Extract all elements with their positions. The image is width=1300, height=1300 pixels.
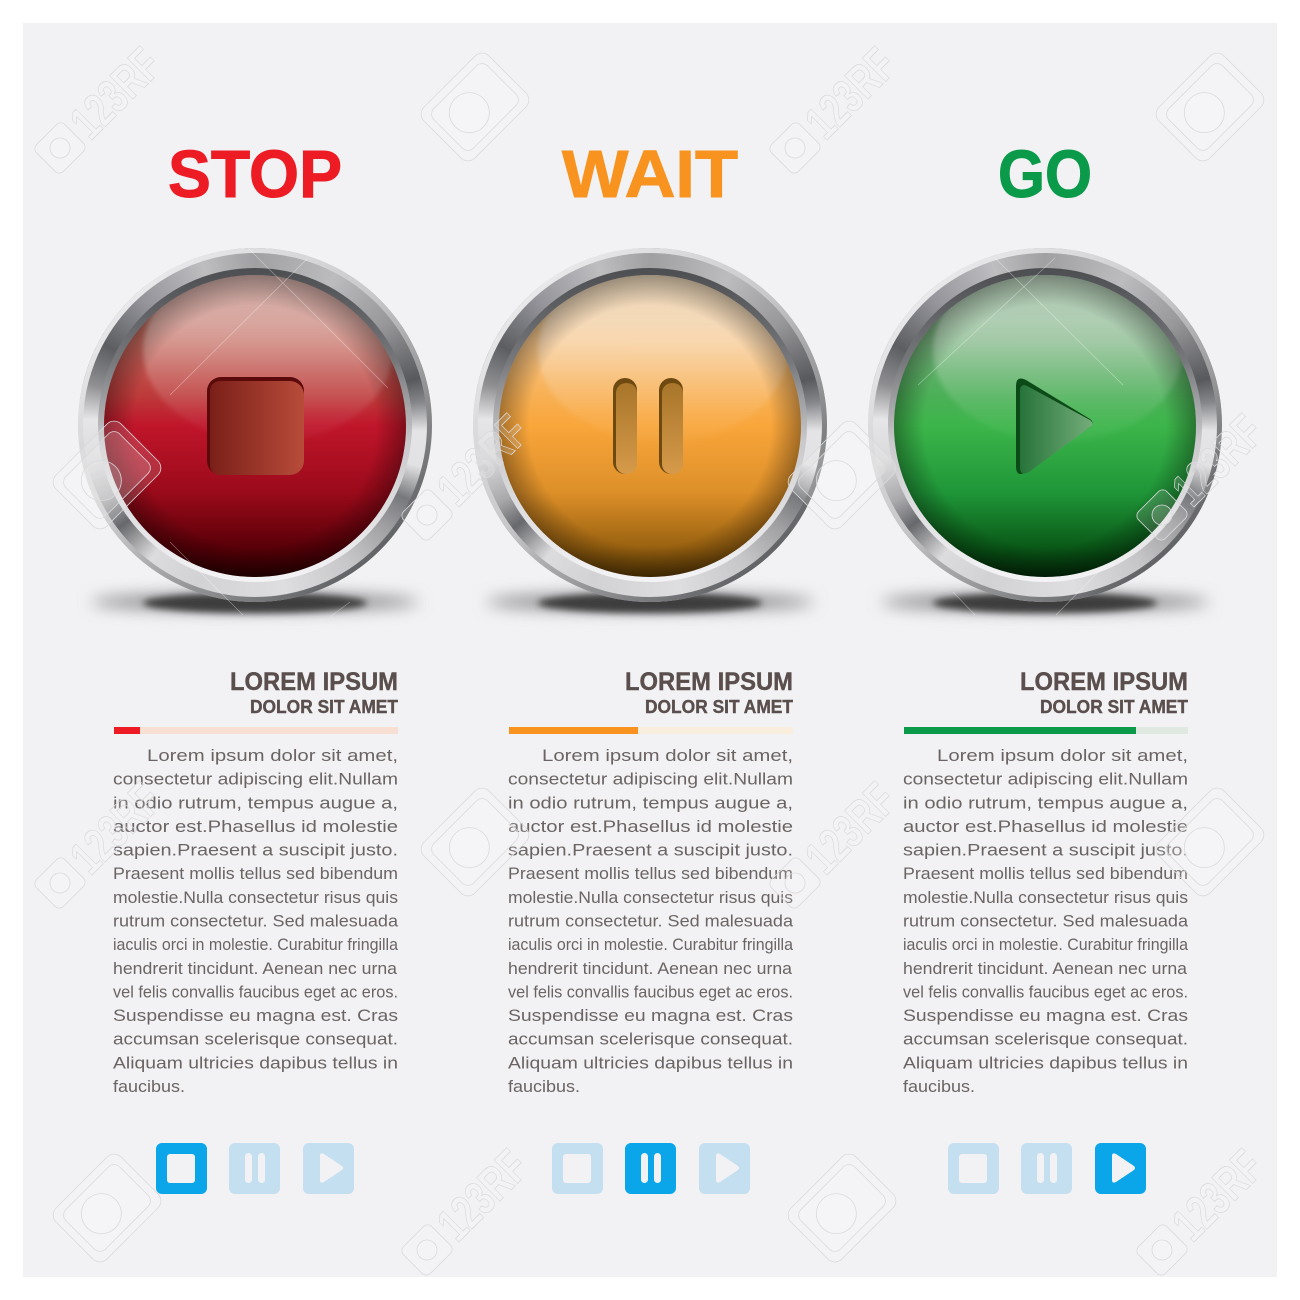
body text: Suspendisse eu magna est. Cras bbox=[508, 1006, 793, 1025]
column heading: LOREM IPSUM bbox=[230, 668, 398, 696]
body text: iaculis orci in molestie. Curabitur fringilla bbox=[508, 935, 794, 954]
body text: auctor est.Phasellus id molestie bbox=[903, 817, 1188, 836]
body text: hendrerit tincidunt. Aenean nec urna bbox=[508, 959, 793, 978]
column heading bbox=[230, 668, 398, 717]
body text: hendrerit tincidunt. Aenean nec urna bbox=[903, 959, 1188, 978]
controls: wait column bbox=[552, 1143, 750, 1194]
body text: consectetur adipiscing elit.Nullam bbox=[508, 770, 793, 789]
shadow bbox=[881, 593, 1209, 613]
body text: Aliquam ultricies dapibus tellus in bbox=[903, 1053, 1188, 1072]
body text: accumsan scelerisque consequat. bbox=[113, 1030, 398, 1049]
body text: vel felis convallis faucibus eget ac eros. bbox=[508, 982, 793, 1001]
body text: consectetur adipiscing elit.Nullam bbox=[903, 770, 1188, 789]
body text: sapien.Praesent a suscipit justo. bbox=[508, 841, 793, 860]
body text: auctor est.Phasellus id molestie bbox=[113, 817, 398, 836]
body text: iaculis orci in molestie. Curabitur fringilla bbox=[113, 935, 399, 954]
watermark overlay: 123RF bbox=[428, 1140, 539, 1251]
body text: accumsan scelerisque consequat. bbox=[903, 1030, 1188, 1049]
body text: Lorem ipsum dolor sit amet, bbox=[147, 746, 398, 765]
watermark overlay: 123RF bbox=[61, 773, 172, 884]
glass bbox=[104, 258, 406, 577]
shadow bbox=[91, 593, 419, 613]
body text: in odio rutrum, tempus augue a, bbox=[903, 793, 1188, 812]
watermark overlay: 123RF bbox=[796, 38, 907, 149]
heading: stop: STOP bbox=[168, 137, 342, 212]
body text: hendrerit tincidunt. Aenean nec urna bbox=[113, 959, 398, 978]
column heading: DOLOR SIT AMET bbox=[250, 697, 398, 717]
body text: Aliquam ultricies dapibus tellus in bbox=[113, 1053, 398, 1072]
body text: faucibus. bbox=[508, 1077, 580, 1096]
body text: Suspendisse eu magna est. Cras bbox=[113, 1006, 398, 1025]
button: orange pause bbox=[473, 248, 827, 622]
body text bbox=[113, 746, 399, 1096]
body text: rutrum consectetur. Sed malesuada bbox=[508, 912, 794, 930]
body text: vel felis convallis faucibus eget ac eros. bbox=[113, 982, 398, 1001]
body text: in odio rutrum, tempus augue a, bbox=[113, 793, 398, 812]
column heading bbox=[1020, 668, 1188, 717]
column heading: LOREM IPSUM bbox=[1020, 668, 1188, 696]
heading: wait: WAIT bbox=[562, 137, 738, 212]
column heading: DOLOR SIT AMET bbox=[1040, 697, 1188, 717]
body text: molestie.Nulla consectetur risus quis bbox=[113, 888, 398, 907]
controls: stop column bbox=[156, 1143, 354, 1194]
body text bbox=[508, 746, 794, 1096]
body text: sapien.Praesent a suscipit justo. bbox=[113, 841, 398, 860]
body text: Aliquam ultricies dapibus tellus in bbox=[508, 1053, 793, 1072]
progress bar bbox=[904, 727, 1188, 734]
watermark overlay: 123RF bbox=[1163, 405, 1274, 516]
icon: play bbox=[1016, 378, 1092, 474]
body text: molestie.Nulla consectetur risus quis bbox=[903, 888, 1188, 907]
body text: Praesent mollis tellus sed bibendum bbox=[508, 864, 793, 883]
controls: go column bbox=[948, 1143, 1146, 1194]
body text: auctor est.Phasellus id molestie bbox=[508, 817, 793, 836]
body text: rutrum consectetur. Sed malesuada bbox=[903, 912, 1189, 930]
body text: in odio rutrum, tempus augue a, bbox=[508, 793, 793, 812]
progress bar bbox=[509, 727, 793, 734]
body text: Lorem ipsum dolor sit amet, bbox=[542, 746, 793, 765]
progress bar bbox=[114, 727, 398, 734]
body text: sapien.Praesent a suscipit justo. bbox=[903, 841, 1188, 860]
column heading: DOLOR SIT AMET bbox=[645, 697, 793, 717]
body text: consectetur adipiscing elit.Nullam bbox=[113, 770, 398, 789]
body text: Lorem ipsum dolor sit amet, bbox=[937, 746, 1188, 765]
column heading bbox=[625, 668, 793, 717]
body text: molestie.Nulla consectetur risus quis bbox=[508, 888, 793, 907]
body text: rutrum consectetur. Sed malesuada bbox=[113, 912, 399, 930]
body text: Praesent mollis tellus sed bibendum bbox=[113, 864, 398, 883]
body text: Suspendisse eu magna est. Cras bbox=[903, 1006, 1188, 1025]
button: green play bbox=[868, 248, 1222, 622]
body text bbox=[903, 746, 1189, 1096]
heading: go: GO bbox=[998, 137, 1092, 212]
icon: pause bbox=[613, 378, 683, 474]
button: red stop bbox=[78, 248, 432, 622]
column heading: LOREM IPSUM bbox=[625, 668, 793, 696]
body text: accumsan scelerisque consequat. bbox=[508, 1030, 793, 1049]
watermark overlay: 123RF bbox=[1163, 1140, 1274, 1251]
body text: faucibus. bbox=[903, 1077, 975, 1096]
glass bbox=[894, 258, 1196, 577]
body text: vel felis convallis faucibus eget ac eros. bbox=[903, 982, 1188, 1001]
shadow bbox=[486, 593, 814, 613]
watermark overlay: 123RF bbox=[796, 773, 907, 884]
watermark overlay: 123RF bbox=[61, 38, 172, 149]
glass bbox=[499, 258, 801, 577]
icon: stop bbox=[207, 377, 304, 475]
body text: iaculis orci in molestie. Curabitur fringilla bbox=[903, 935, 1189, 954]
body text: Praesent mollis tellus sed bibendum bbox=[903, 864, 1188, 883]
body text: faucibus. bbox=[113, 1077, 185, 1096]
watermark overlay: 123RF bbox=[428, 405, 539, 516]
